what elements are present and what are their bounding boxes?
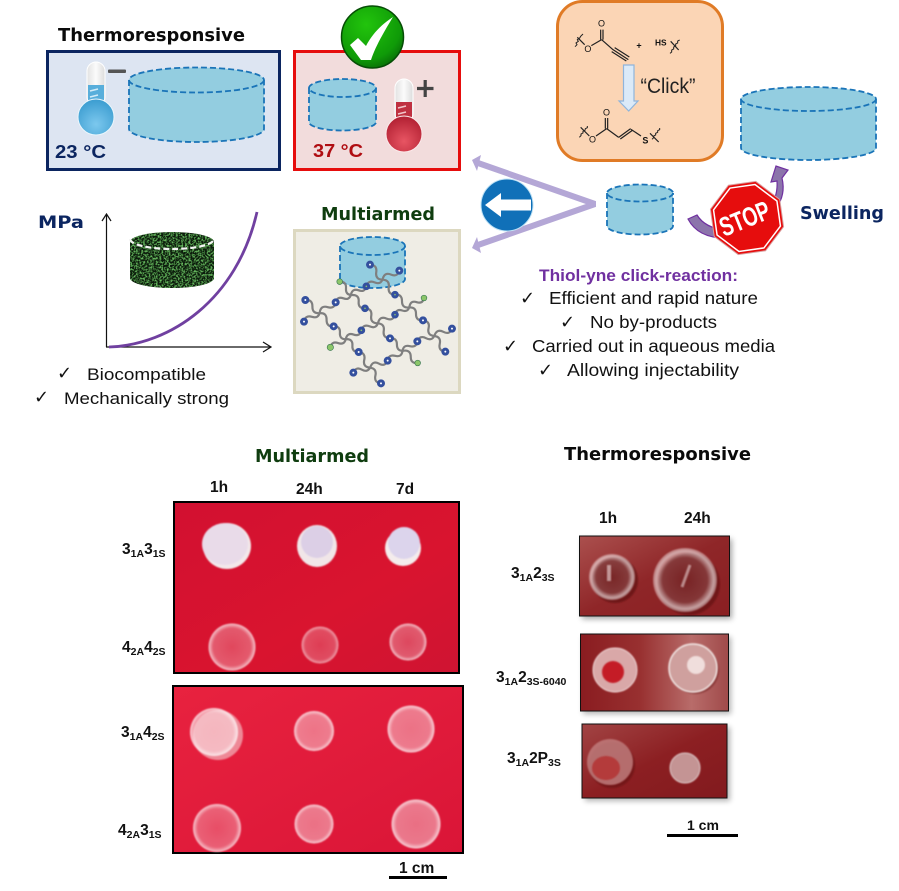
label: Click: “Click” bbox=[640, 75, 696, 98]
panel: multiarmed network bbox=[294, 230, 460, 392]
sample labels: multiarmed: 2S bbox=[152, 731, 165, 743]
text: biocompatible and mechanically strong bbox=[34, 363, 229, 408]
text: biocompatible and mechanically strong: Biocompatible bbox=[87, 365, 206, 384]
heading: Thermoresponsive lower: Thermoresponsive bbox=[564, 444, 751, 465]
illustration: large swollen cylinder bbox=[741, 87, 876, 160]
chemical structures: O bbox=[603, 108, 610, 118]
icon: stop sign: STOP bbox=[715, 195, 774, 243]
text: biocompatible and mechanically strong: Mechanically strong bbox=[64, 389, 229, 408]
chemical structures bbox=[575, 19, 680, 146]
scale bar: multiarmed 1 cm bbox=[389, 860, 447, 879]
sample labels: multiarmed: 4 bbox=[143, 724, 152, 741]
sample labels: multiarmed: 2S bbox=[153, 646, 166, 658]
heading: Multiarmed upper: Multiarmed bbox=[321, 205, 435, 225]
temperature label 37 °C: 37 °C bbox=[313, 140, 363, 161]
chemical structures: S bbox=[642, 136, 648, 146]
time labels: multiarmed bbox=[210, 479, 414, 498]
panel: click reaction scheme bbox=[558, 2, 722, 160]
text: thiol-yne click-reaction benefits: ✓ bbox=[560, 312, 575, 333]
sample labels: multiarmed: 1S bbox=[153, 548, 166, 560]
sample labels: thermoresponsive: 3S bbox=[542, 572, 555, 584]
photo: multiarmed gels top bbox=[174, 502, 459, 673]
text: thiol-yne click-reaction benefits: Allowing injectability bbox=[567, 360, 739, 380]
sample labels: thermoresponsive: 2P bbox=[529, 750, 548, 767]
sample labels: thermoresponsive bbox=[496, 565, 567, 769]
panel: thermoresponsive at 23 °C bbox=[48, 52, 280, 170]
time labels: multiarmed: 7d bbox=[396, 481, 414, 498]
sample labels: multiarmed: 1A bbox=[131, 548, 144, 560]
scale bar: thermoresponsive 1 cm: 1 cm bbox=[687, 817, 719, 833]
chemical structures: O bbox=[589, 135, 596, 145]
scale bar: thermoresponsive 1 cm bbox=[667, 817, 738, 837]
sample labels: thermoresponsive: 3 bbox=[507, 750, 516, 767]
text: thiol-yne click-reaction benefits bbox=[503, 266, 775, 381]
arrows: purple pathway arrows to left bbox=[472, 155, 595, 253]
time labels: multiarmed: 24h bbox=[296, 481, 323, 498]
sample labels: multiarmed: 1A bbox=[130, 731, 143, 743]
chemical structures: O bbox=[598, 19, 605, 29]
sample labels: thermoresponsive: 3S bbox=[548, 757, 561, 769]
temperature label 23 °C: 23 °C bbox=[55, 141, 106, 162]
sample labels: multiarmed: 3 bbox=[122, 541, 131, 558]
sample labels: multiarmed: 2A bbox=[127, 829, 140, 841]
label: Swelling: Swelling bbox=[800, 204, 884, 224]
time labels: multiarmed: 1h bbox=[210, 479, 228, 496]
illustration: shrunken hydrogel cylinder bbox=[309, 79, 376, 130]
sample labels: multiarmed: 4 bbox=[144, 639, 153, 656]
sample labels: thermoresponsive: 1A bbox=[520, 572, 533, 584]
text: thiol-yne click-reaction benefits: Efficient and rapid nature bbox=[549, 288, 758, 308]
label: MPa axis: MPa bbox=[38, 213, 84, 233]
sample labels: thermoresponsive: 2 bbox=[518, 669, 527, 686]
sample labels: multiarmed: 3 bbox=[144, 541, 153, 558]
text: thiol-yne click-reaction benefits: Carried out in aqueous media bbox=[532, 336, 775, 356]
chemical structures: + bbox=[636, 40, 642, 50]
photo: thermoresponsive gels 3 bbox=[582, 724, 730, 801]
arrow: curved swelling arrow bbox=[688, 166, 788, 238]
illustration: small central cylinder bbox=[607, 184, 673, 234]
text: biocompatible and mechanically strong: ✓ bbox=[34, 387, 49, 408]
icon: cold thermometer bbox=[78, 62, 126, 135]
chemical structures: O bbox=[584, 44, 591, 54]
sample labels: thermoresponsive: 3 bbox=[496, 669, 505, 686]
time labels: thermoresponsive: 24h bbox=[684, 510, 711, 527]
icon: warm thermometer bbox=[386, 79, 434, 152]
icon: stop sign bbox=[707, 178, 787, 258]
sample labels: thermoresponsive: 1A bbox=[505, 676, 518, 688]
arrow: reaction down arrow bbox=[619, 65, 638, 111]
illustration: polymer network strands and nodes bbox=[301, 262, 454, 386]
sample labels: multiarmed: 3 bbox=[121, 724, 130, 741]
photo: thermoresponsive gels 1 bbox=[580, 536, 732, 619]
icon: blue direction sign bbox=[481, 179, 533, 231]
heading: Thermoresponsive: Thermoresponsive bbox=[58, 25, 245, 46]
sample labels: multiarmed: 3 bbox=[140, 822, 149, 839]
sample labels: thermoresponsive: 1A bbox=[516, 757, 529, 769]
photo: thermoresponsive gels 2 bbox=[580, 634, 731, 714]
sample labels: thermoresponsive: 3S-6040 bbox=[527, 676, 567, 688]
text: thiol-yne click-reaction benefits: ✓ bbox=[503, 336, 518, 357]
sample labels: multiarmed: 2A bbox=[131, 646, 144, 658]
icon: green check badge bbox=[342, 6, 404, 68]
photo: multiarmed gels bottom bbox=[173, 686, 463, 853]
sample labels: multiarmed: 4 bbox=[122, 639, 131, 656]
text: thiol-yne click-reaction benefits: No by-products bbox=[590, 312, 717, 332]
sample labels: multiarmed bbox=[118, 541, 166, 841]
sample labels: thermoresponsive: 3 bbox=[511, 565, 520, 582]
illustration: reinforced green cylinder bbox=[130, 232, 214, 288]
heading: Multiarmed lower: Multiarmed bbox=[255, 447, 369, 467]
text: biocompatible and mechanically strong: ✓ bbox=[57, 363, 72, 384]
sample labels: thermoresponsive: 2 bbox=[533, 565, 542, 582]
sample labels: multiarmed: 4 bbox=[118, 822, 127, 839]
time labels: thermoresponsive bbox=[599, 510, 711, 527]
text: thiol-yne click-reaction benefits: ✓ bbox=[538, 360, 553, 381]
chart: stress curve bbox=[102, 212, 271, 352]
panel: thermoresponsive at 37 °C bbox=[294, 52, 460, 170]
text: thiol-yne click-reaction benefits: Thiol-yne click-reaction: bbox=[539, 266, 738, 285]
illustration: swollen hydrogel cylinder bbox=[129, 67, 264, 142]
scale bar: multiarmed 1 cm: 1 cm bbox=[399, 860, 434, 877]
sample labels: multiarmed: 1S bbox=[149, 829, 162, 841]
chemical structures: HS bbox=[655, 37, 667, 47]
time labels: thermoresponsive: 1h bbox=[599, 510, 617, 527]
text: thiol-yne click-reaction benefits: ✓ bbox=[520, 288, 535, 309]
illustration: cylinder in network panel bbox=[340, 237, 405, 288]
